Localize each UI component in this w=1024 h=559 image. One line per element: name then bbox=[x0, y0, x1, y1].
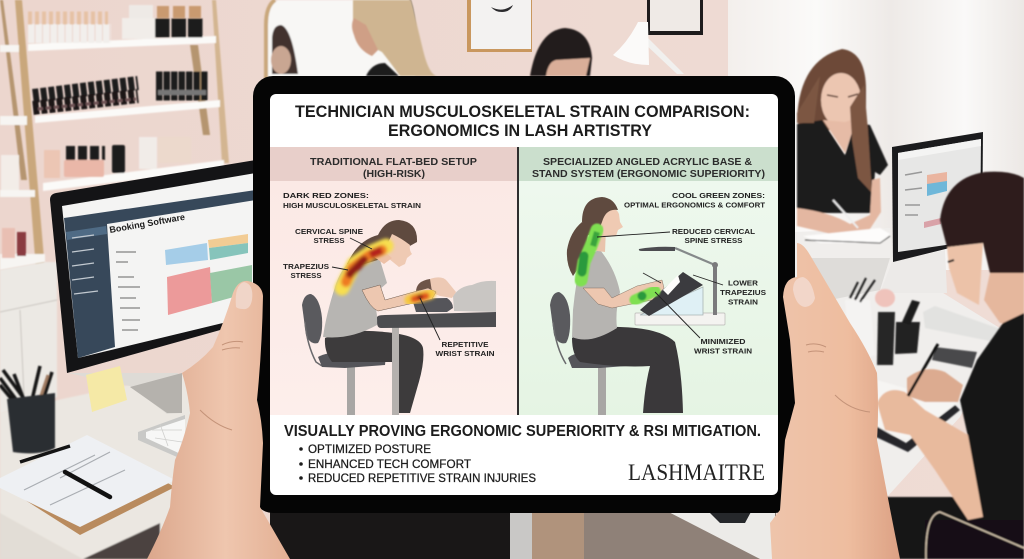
legs bbox=[572, 327, 683, 413]
main title: ERGONOMICS IN LASH ARTISTRY bbox=[388, 121, 653, 140]
label: lower trapezius strain: LOWER bbox=[728, 280, 758, 288]
label: cervical spine stress bbox=[295, 229, 372, 249]
label: lower trapezius strain: TRAPEZIUS bbox=[720, 290, 766, 297]
brand logo: LASHMAITRE bbox=[628, 460, 765, 485]
illustration: hunched technician at flat bed bbox=[302, 220, 496, 415]
panel header left bbox=[270, 147, 518, 181]
sticky note bbox=[86, 366, 127, 412]
neck and head bbox=[590, 225, 606, 252]
legend: dark red zones bbox=[283, 191, 421, 210]
left desktop monitor showing booking software: Booking Software bbox=[109, 212, 186, 235]
panel background left bbox=[270, 181, 518, 415]
right desk bbox=[795, 228, 1003, 559]
legend: dark red zones: HIGH MUSCULOSKELETAL STRAIN bbox=[283, 203, 421, 210]
legs bbox=[325, 331, 423, 413]
heat zone: neck and shoulder bbox=[581, 230, 597, 280]
pen holder bbox=[0, 366, 55, 453]
panel header right: STAND SYSTEM (ERGONOMIC SUPERIORITY) bbox=[532, 168, 765, 180]
arm bbox=[362, 285, 436, 311]
shelving with lash products bbox=[0, 0, 229, 270]
label: reduced cervical spine stress bbox=[597, 229, 756, 245]
patient bbox=[413, 277, 496, 312]
benefits list: REDUCED REPETITIVE STRAIN INJURIES bbox=[308, 473, 536, 485]
label: trapezius stress: STRESS bbox=[290, 273, 322, 280]
tablet bezel bbox=[253, 76, 795, 513]
center divider bbox=[517, 147, 519, 415]
label: repetitive wrist strain bbox=[420, 298, 494, 358]
legend: dark red zones: DARK RED ZONES: bbox=[283, 191, 369, 200]
benefits list: OPTIMIZED POSTURE bbox=[308, 444, 431, 456]
torso bbox=[323, 258, 387, 338]
heat zone: wrist bbox=[410, 294, 430, 300]
heat zone: neck and trapezius bbox=[342, 246, 386, 288]
label: minimized wrist strain: MINIMIZED bbox=[700, 339, 746, 346]
legend: cool green zones bbox=[624, 191, 766, 210]
right foreground technician writing bbox=[876, 172, 1024, 559]
clipboard with pen bbox=[0, 435, 175, 535]
label: lower trapezius strain: STRAIN bbox=[728, 300, 758, 306]
keyboard bbox=[138, 415, 185, 460]
angled stand and lamp bbox=[635, 247, 725, 325]
conclusion heading: VISUALLY PROVING ERGONOMIC SUPERIORITY & RSI MITIGATION. bbox=[284, 423, 761, 440]
benefits list bbox=[299, 444, 536, 485]
stylus bbox=[643, 273, 661, 283]
ponytail bbox=[567, 222, 588, 276]
panel header left: TRADITIONAL FLAT-BED SETUP bbox=[310, 156, 477, 168]
label: minimized wrist strain: WRIST STRAIN bbox=[694, 348, 752, 356]
framed certificate and desk lamp bbox=[613, 0, 703, 74]
panel background right bbox=[519, 181, 778, 415]
label: repetitive wrist strain: WRIST STRAIN bbox=[436, 351, 494, 358]
right hand holding tablet bbox=[770, 243, 900, 559]
background technician with blonde hair bbox=[352, 0, 437, 76]
label: trapezius stress: TRAPEZIUS bbox=[283, 264, 329, 271]
panel header left: (HIGH-RISK) bbox=[363, 168, 425, 180]
wall poster with lash illustration bbox=[467, 0, 532, 52]
panel header right: SPECIALIZED ANGLED ACRYLIC BASE & bbox=[543, 156, 752, 168]
stool bbox=[550, 292, 640, 415]
panel header right bbox=[519, 147, 778, 181]
legend: cool green zones: OPTIMAL ERGONOMICS & COMFORT bbox=[624, 202, 766, 210]
main title bbox=[295, 102, 750, 140]
tablet device bbox=[253, 76, 795, 513]
pen cups and stationery on right desk bbox=[845, 278, 1003, 368]
arm bbox=[583, 280, 664, 308]
right background technician writing bbox=[797, 49, 890, 243]
background technician with dark hair bbox=[530, 28, 592, 76]
label: reduced cervical spine stress: SPINE STRESS bbox=[684, 238, 743, 245]
benefits list: ENHANCED TECH COMFORT bbox=[308, 459, 471, 471]
label: minimized wrist strain bbox=[655, 292, 752, 356]
label: trapezius stress bbox=[283, 264, 348, 280]
panel: specialized angled acrylic base bbox=[519, 147, 778, 415]
hair and head bbox=[347, 220, 417, 266]
left desktop monitor showing booking software bbox=[50, 160, 256, 414]
cabinet and left desk bbox=[0, 262, 260, 559]
label: reduced cervical spine stress: REDUCED CERVICAL bbox=[672, 229, 756, 236]
mirror with reflected figure bbox=[266, 0, 415, 80]
label: cervical spine stress: STRESS bbox=[314, 238, 345, 245]
legend: cool green zones: COOL GREEN ZONES: bbox=[672, 191, 765, 200]
label: repetitive wrist strain: REPETITIVE bbox=[442, 342, 489, 349]
heat zone: wrist bbox=[635, 291, 655, 300]
main title: TECHNICIAN MUSCULOSKELETAL STRAIN COMPARISON: bbox=[295, 102, 750, 121]
chair bbox=[302, 294, 386, 415]
right desktop monitor bbox=[880, 132, 983, 293]
illustration: upright technician at angled stand bbox=[550, 197, 725, 415]
torso bbox=[572, 250, 620, 340]
panel: traditional flat-bed setup bbox=[270, 147, 518, 415]
tablet screen bbox=[270, 94, 778, 495]
label: cervical spine stress: CERVICAL SPINE bbox=[295, 229, 363, 236]
left hand holding tablet bbox=[147, 281, 290, 559]
flat bed table bbox=[377, 312, 496, 415]
label: lower trapezius strain bbox=[693, 275, 766, 306]
dark chair area under tablet bbox=[270, 505, 776, 559]
